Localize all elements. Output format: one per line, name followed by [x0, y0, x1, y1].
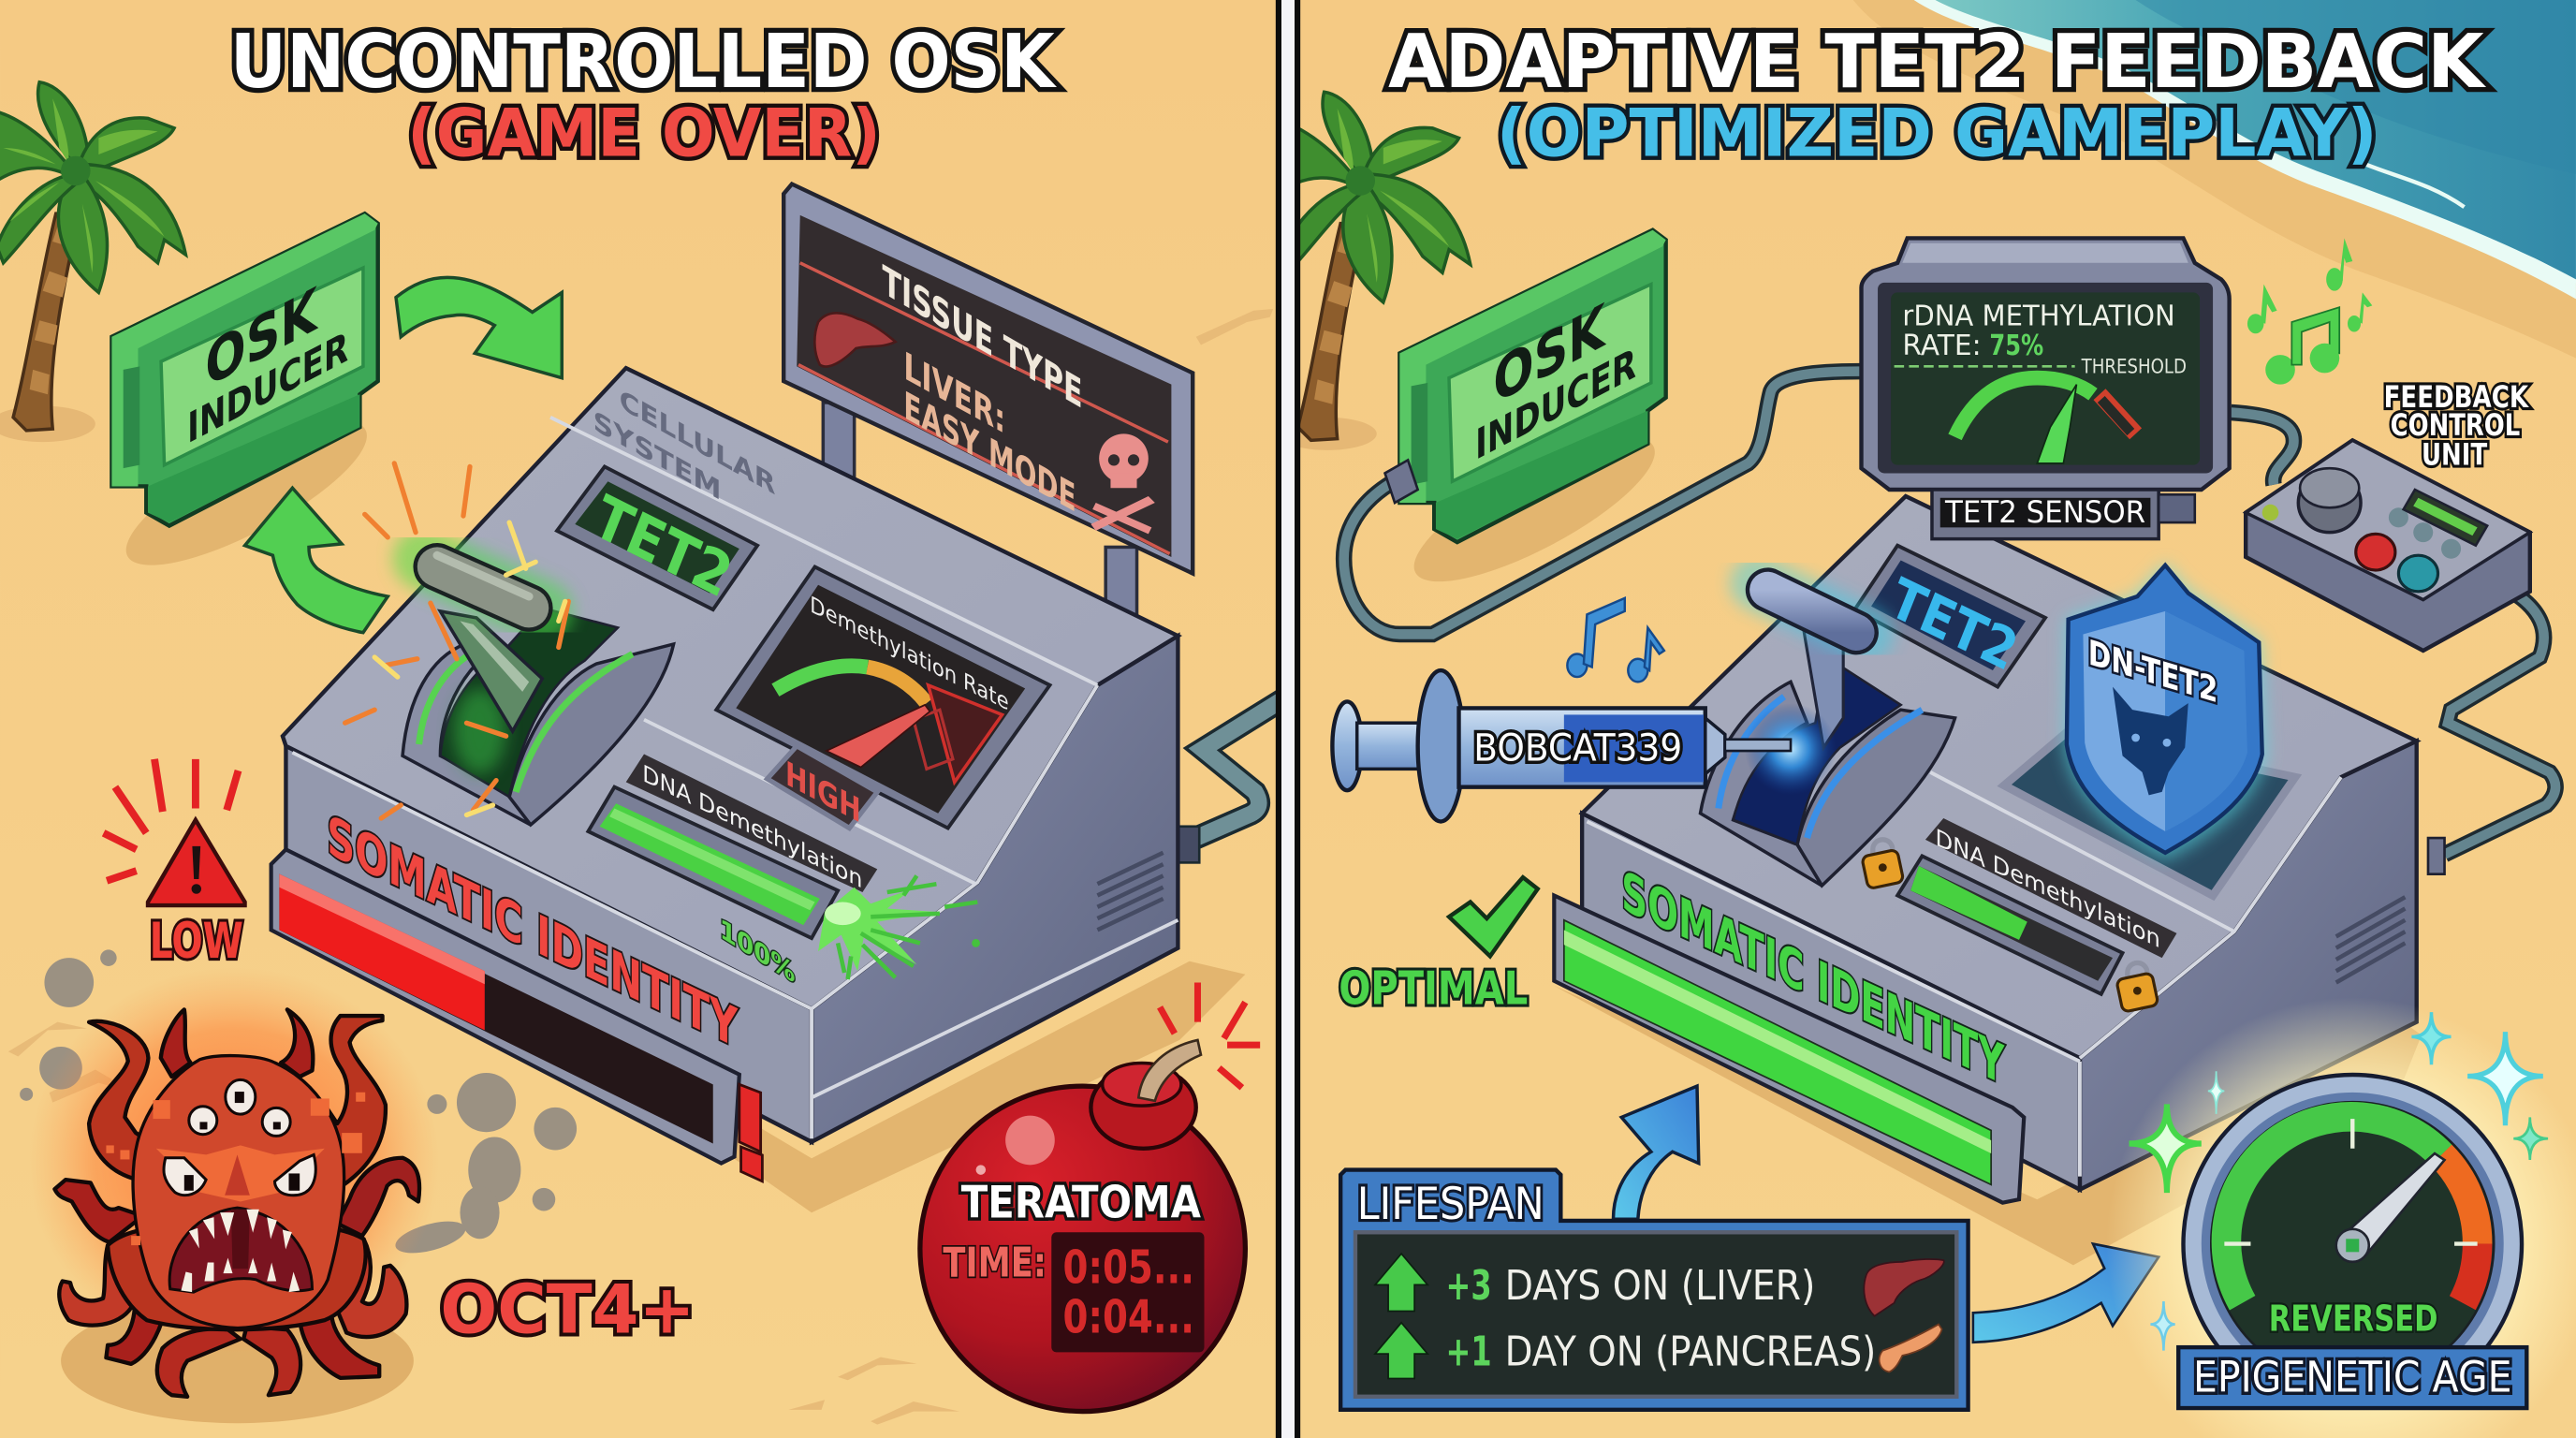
sign: tissue type: EASY MODE [903, 383, 1076, 521]
bomb: teratoma timer [920, 983, 1260, 1412]
monster eyes [164, 1079, 315, 1196]
sign: tissue type: LIVER: [903, 344, 1005, 444]
label: epigenetic age: EPIGENETIC AGE [2193, 1353, 2511, 1402]
vents [2336, 897, 2405, 983]
red alert tag [739, 1084, 762, 1181]
panel: lifespan [1340, 1170, 1969, 1410]
cartridge label: OSK [205, 272, 319, 402]
TET2 display: TET2 [1881, 566, 2026, 684]
palm tree [0, 82, 185, 442]
padlock [1862, 840, 1904, 889]
needle [2037, 385, 2076, 463]
label: cellular system: SYSTEM [593, 405, 722, 507]
monitor: TET2 sensor: rDNA METHYLATION [1902, 300, 2175, 332]
somatic identity bar: optimal [1554, 895, 2024, 1203]
DNA demethylation bar: 100% [720, 914, 795, 990]
sign: tissue type: TISSUE TYPE [883, 257, 1083, 418]
machine: cellular system [271, 368, 1284, 1212]
arrow: lifespan to somatic identity [1613, 1086, 1699, 1219]
arrow: cartridge into machine [396, 277, 562, 378]
feedback control unit [2246, 440, 2530, 651]
cable at back [1196, 698, 1284, 838]
somatic identity title: SOMATIC IDENTITY [1621, 858, 2005, 1098]
check mark [1449, 877, 1538, 956]
cartridge label: OSK [1493, 288, 1607, 418]
monster: OCT4+ [28, 967, 440, 1423]
icon: pancreas [1880, 1325, 1942, 1372]
somatic identity bar: low [271, 849, 762, 1181]
title: uncontrolled OSK: UNCONTROLLED OSK [230, 19, 1057, 105]
title: adaptive TET2 feedback: ADAPTIVE TET2 FEEDBACK [1388, 19, 2486, 105]
highlight strokes [1587, 772, 2341, 1177]
timer readout [943, 1232, 1204, 1352]
somatic identity title: SOMATIC IDENTITY [327, 803, 739, 1062]
DNA demethylation bar [1897, 818, 2176, 994]
DNA demethylation bar [588, 755, 980, 990]
cartridge label [1475, 288, 1636, 471]
energy burst [1745, 703, 1837, 795]
buttons [2262, 505, 2278, 521]
sign posts [823, 403, 1137, 621]
lifespan row: liver: DAYS ON (LIVER) [1505, 1262, 1815, 1310]
panel: adaptive TET2 feedback (optimized gameplay) [1278, 0, 2576, 1438]
lever stem [440, 611, 542, 731]
subtitle: game over: (GAME OVER) [407, 95, 881, 172]
palm tree [1278, 92, 1471, 450]
center divider [1276, 0, 1300, 1438]
music notes: blue [1567, 598, 1664, 682]
teratoma label: TERATOMA [961, 1177, 1201, 1228]
arrow: machine back to cartridge [245, 488, 388, 633]
monitor: TET2 sensor [1862, 238, 2230, 539]
monster mouth [169, 1208, 313, 1292]
TET2 sensor plate: TET2 SENSOR [1944, 496, 2145, 530]
sign: tissue type [783, 184, 1193, 621]
HIGH plate [768, 746, 877, 829]
gauge needle [2343, 1153, 2445, 1255]
cables [1344, 372, 2555, 855]
sand dune marks [8, 309, 1273, 1425]
sparkles [2130, 1012, 2548, 1351]
label: feedback control unit: UNIT [2422, 439, 2488, 473]
icon: skull and crossbones [1090, 433, 1155, 534]
panel: uncontrolled OSK (game over) [0, 19, 1284, 1425]
sparks [345, 463, 568, 818]
label: feedback control unit: CONTROL [2391, 409, 2520, 443]
lever glow [424, 559, 542, 611]
arrow: lifespan to epigenetic age [1973, 1244, 2159, 1343]
monitor: TET2 sensor: THRESHOLD [2081, 354, 2187, 377]
gauge: demethylation rate [716, 566, 1050, 831]
LED display [2404, 490, 2487, 546]
label: cellular system: CELLULAR [620, 384, 775, 502]
bobcat emblem [2113, 687, 2188, 795]
knob [2298, 473, 2361, 533]
green splash [818, 875, 980, 979]
cartridge: OSK inducer [1397, 230, 1672, 608]
monitor: TET2 sensor: RATE: [1902, 330, 1982, 362]
monitor: TET2 sensor: 75% [1989, 330, 2043, 362]
fuse sparks [1160, 983, 1260, 1088]
music notes: green [2247, 238, 2372, 385]
tentacles [54, 1009, 419, 1397]
gauge needle [827, 705, 929, 768]
warning: low identity: LOW [150, 913, 243, 970]
ticks [2224, 1119, 2478, 1244]
timer readout: 0:04... [1063, 1289, 1194, 1343]
TET2 sensor plate [1932, 490, 2195, 539]
DNA demethylation bar: DNA Demethylation [1935, 824, 2160, 954]
lever stem [1804, 631, 1843, 748]
ocean [1853, 0, 2576, 359]
DNA demethylation bar: DNA Demethylation [642, 760, 862, 894]
lifespan row: pancreas: DAY ON (PANCREAS) [1505, 1328, 1876, 1375]
warning: low identity [104, 759, 245, 970]
label: reversed: REVERSED [2269, 1299, 2438, 1341]
shield window [2004, 729, 2295, 895]
gauge: epigenetic age [2106, 997, 2576, 1438]
lever: broken [345, 463, 674, 825]
alert rays [104, 759, 239, 881]
gauge: demethylation rate: Demethylation Rate [810, 591, 1009, 716]
lifespan row: pancreas: +1 [1445, 1328, 1492, 1375]
connector plug [1385, 460, 2445, 874]
lower body mass [108, 1225, 366, 1329]
vents [1097, 853, 1164, 930]
cartridge: OSK inducer [109, 213, 384, 591]
label: optimal: OPTIMAL [1339, 961, 1528, 1015]
label: OCT4+: OCT4+ [440, 1269, 695, 1348]
shield: DN-TET2 [2063, 562, 2267, 861]
subtitle: optimized gameplay: (OPTIMIZED GAMEPLAY) [1497, 95, 2378, 172]
smoke puffs [20, 949, 577, 1259]
icon: liver [1864, 1259, 1944, 1316]
timer readout: 0:05... [1063, 1240, 1194, 1295]
syringe: BOBCAT339: BOBCAT339 [1473, 726, 1682, 770]
machine: cellular system [1554, 496, 2422, 1265]
TET2 display: TET2 [585, 482, 741, 610]
shield: DN-TET2: DN-TET2 [2088, 632, 2217, 711]
syringe: BOBCAT339 [1332, 670, 1791, 822]
label: feedback control unit: FEEDBACK [2384, 381, 2529, 415]
lifespan tab label: LIFESPAN [1357, 1179, 1544, 1230]
lever: stabilized [1701, 583, 1955, 886]
lifespan row: liver: +3 [1445, 1262, 1492, 1310]
cartridge label: INDUCER [1475, 340, 1636, 471]
gauge: demethylation rate: HIGH [785, 753, 861, 831]
cartridge label: INDUCER [187, 323, 348, 454]
green up arrows [1375, 1254, 1427, 1378]
icon: liver [814, 313, 896, 367]
highlight strokes [292, 418, 1178, 1138]
cartridge label [187, 272, 348, 454]
timer readout: TIME: [943, 1240, 1046, 1287]
lever glow [1758, 583, 1866, 634]
monster texture [106, 1093, 365, 1245]
padlock [2116, 962, 2159, 1012]
label: feedback control unit [2384, 381, 2529, 473]
monster head [133, 1056, 344, 1328]
